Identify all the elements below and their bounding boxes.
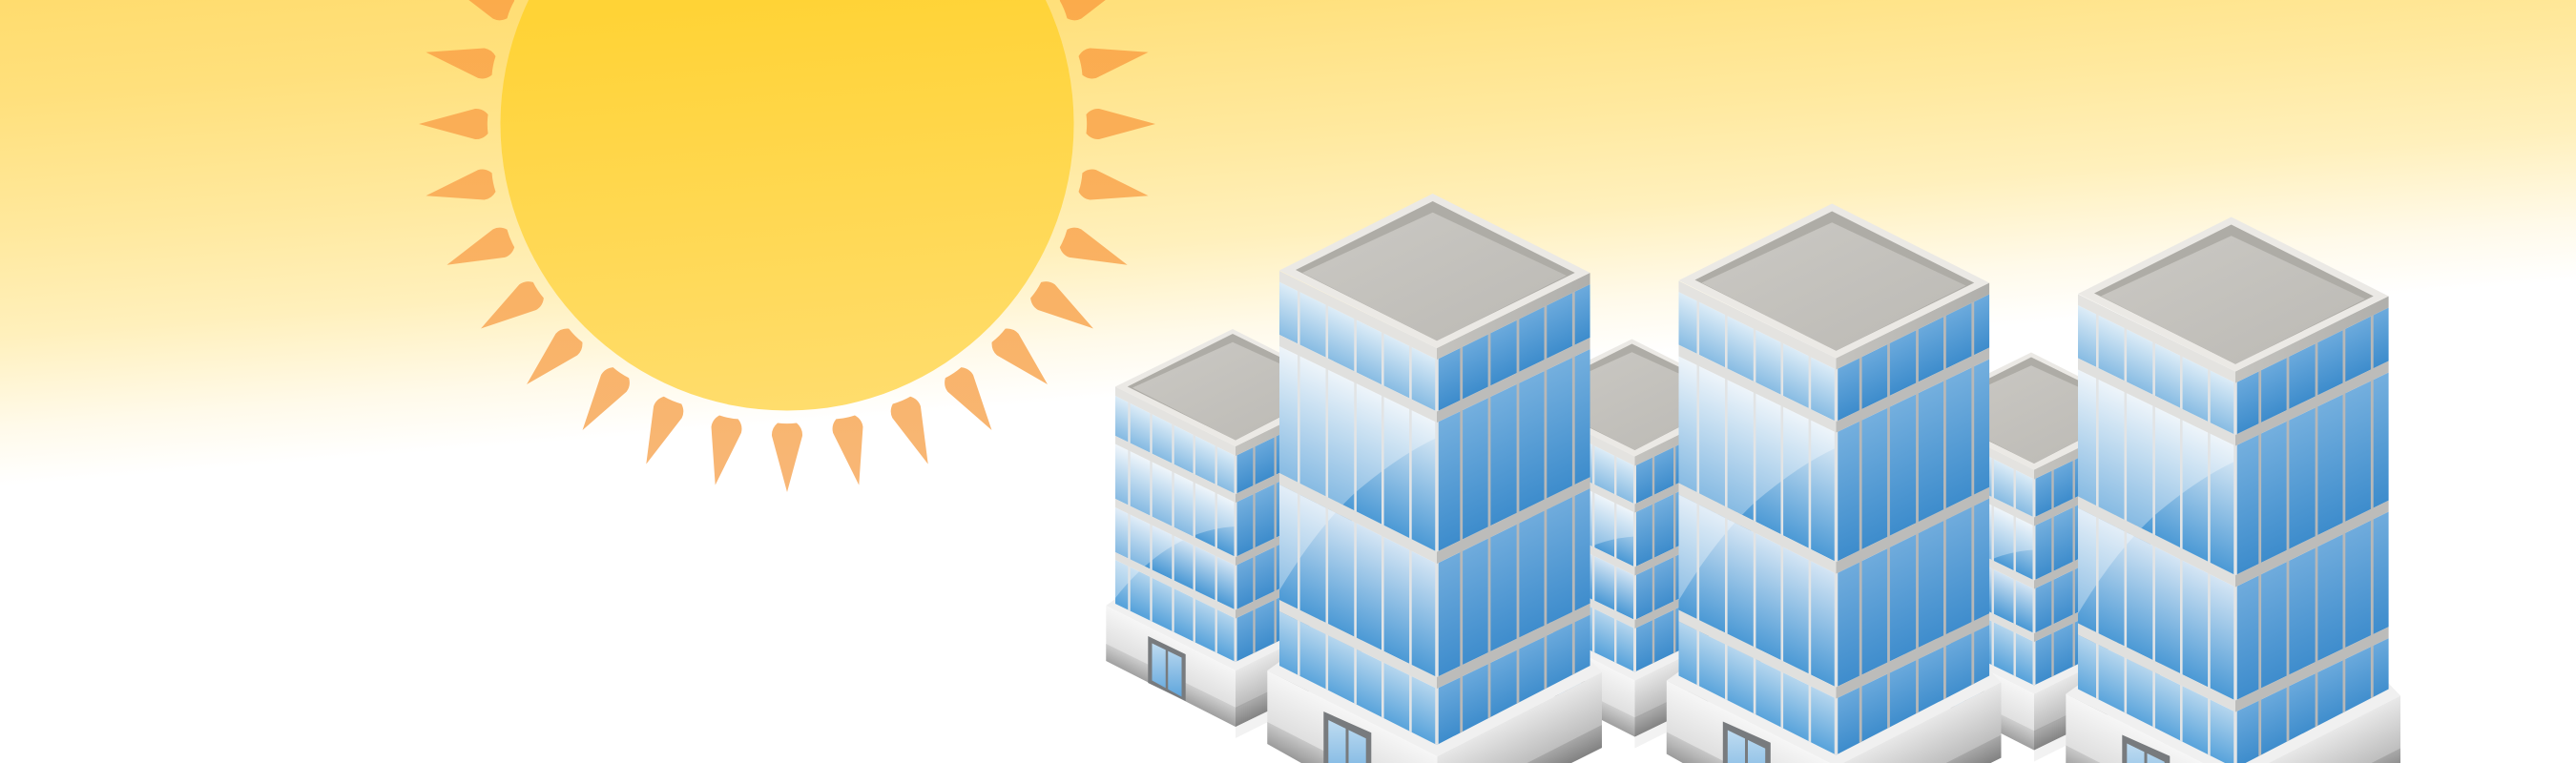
building: large left tower (1267, 194, 1602, 763)
buildings: city block (1106, 194, 2400, 763)
icon: sun disc (500, 0, 1074, 410)
building: large right tower (2066, 217, 2400, 763)
building: small left tower (1106, 329, 1361, 738)
building: small right tower (1904, 353, 2160, 761)
building: large middle tower (1667, 204, 2002, 763)
building: small middle tower (1506, 340, 1761, 748)
icon: sun rays (410, 0, 1164, 496)
